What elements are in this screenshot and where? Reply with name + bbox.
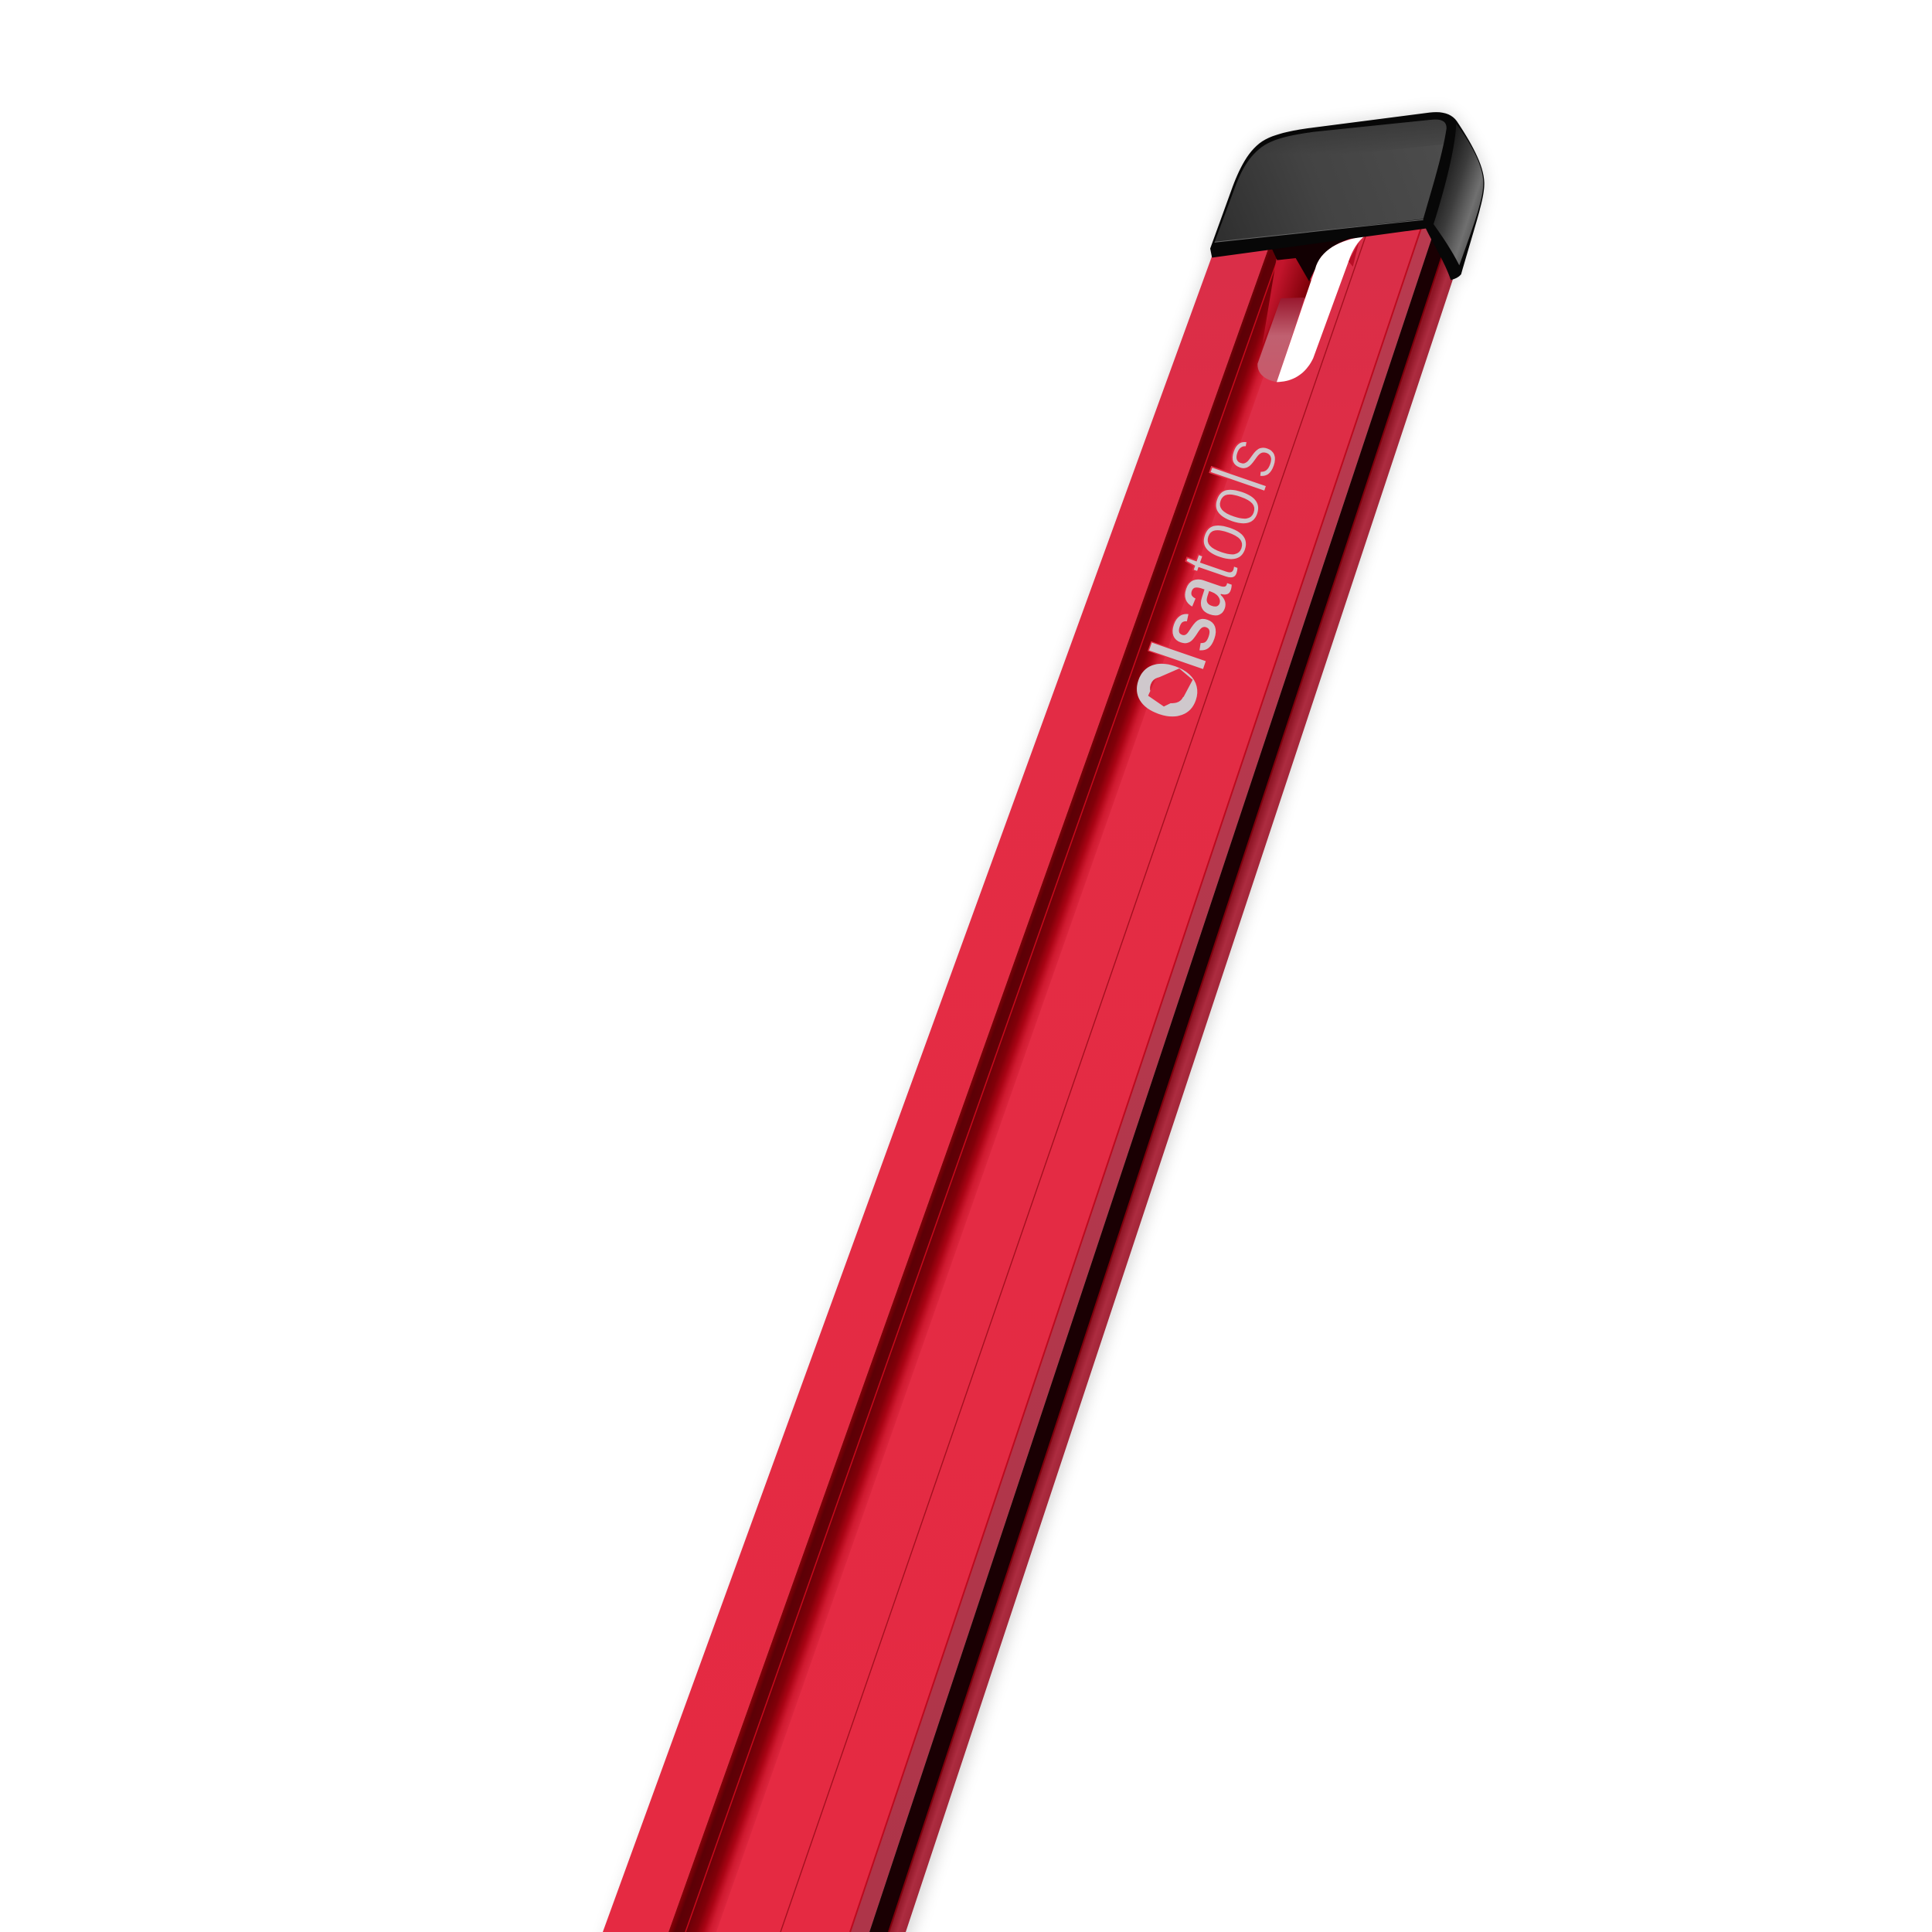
centre face right of seam (781, 216, 1425, 1932)
logo wordmark: Olsatools (1117, 426, 1296, 730)
cap top face (1215, 120, 1447, 242)
slot interior upper shadow (1262, 257, 1311, 345)
cap silhouette (1210, 112, 1485, 280)
left flat face (603, 216, 1280, 1932)
groove dark channel (668, 216, 1293, 1932)
seam line (781, 216, 1372, 1932)
centre face left of seam (696, 216, 1372, 1932)
cap side face (1434, 124, 1483, 265)
black under-cap recess (1270, 235, 1366, 281)
groove bright line (685, 216, 1293, 1932)
chamfer edge line (850, 216, 1425, 1932)
logo hexagon counter (1148, 668, 1192, 706)
chamfer band (850, 216, 1439, 1932)
brand logo: Olsatools (1117, 426, 1296, 730)
drop shadow around rail (603, 112, 1485, 1932)
right outer wall (889, 216, 1474, 1932)
slot right wall sliver (1349, 242, 1359, 267)
cap highlight line (1215, 219, 1423, 242)
rail body (603, 216, 1474, 1932)
black slot channel (869, 216, 1455, 1932)
cap top face shading (1247, 120, 1447, 165)
slot interior pale reflection (1257, 298, 1304, 382)
right wall edge line (889, 216, 1455, 1932)
end cap and slot, drawn in 3x zoomed coordinates (1210, 112, 1485, 382)
slot through-hole (1277, 236, 1364, 382)
groove lit wall with soft fade (685, 216, 1320, 1932)
